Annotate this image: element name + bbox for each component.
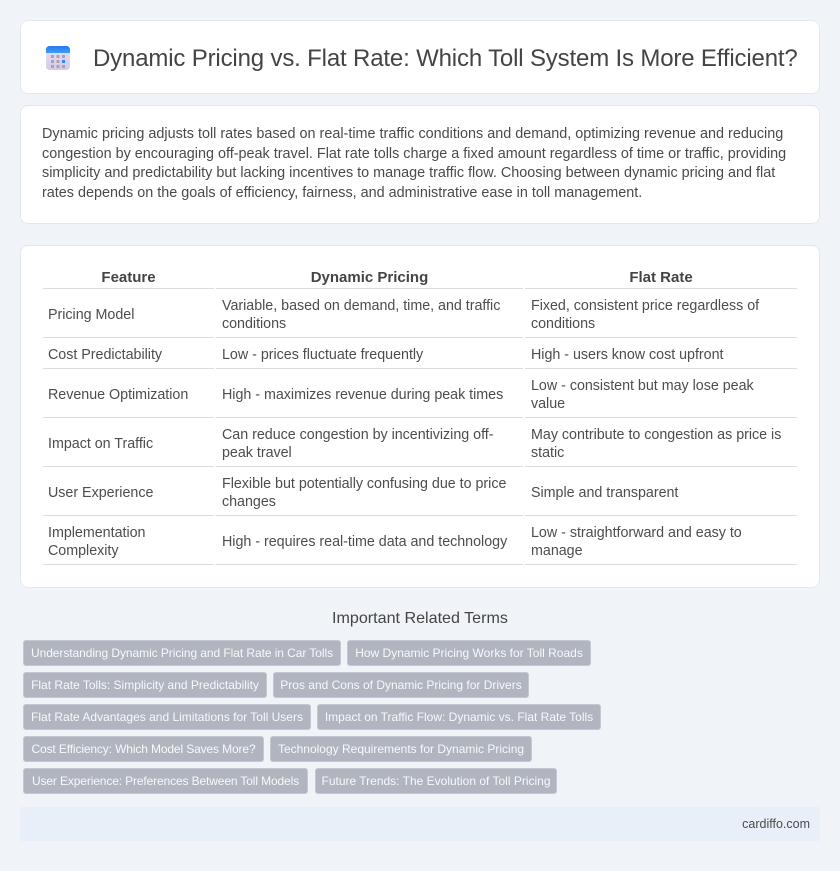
text: value: [531, 396, 565, 412]
header card: [20, 20, 820, 94]
tag list: Cost Efficiency: Which Model Saves More?: [31, 742, 256, 756]
text: conditions: [531, 316, 595, 332]
panel: comparison table: [20, 245, 820, 588]
row: revenue optimization: Revenue Optimization: [48, 387, 188, 403]
text: Low - consistent but may lose peak: [531, 378, 754, 394]
text: High - maximizes revenue during peak times: [222, 387, 503, 403]
panel: intro: [20, 105, 820, 224]
text: Fixed, consistent price regardless of: [531, 298, 759, 314]
row: implementation complexity: [48, 525, 145, 559]
intro text: congestion by encouraging off-peak travel. Flat rate tolls charge a fixed amount regardless of time or traffic, providing: [42, 146, 786, 162]
text: manage: [531, 543, 583, 559]
row: user experience: User Experience: [48, 485, 153, 501]
tag list: Pros and Cons of Dynamic Pricing for Drivers: [280, 678, 522, 692]
table header: Feature: [101, 269, 156, 286]
text: peak travel: [222, 445, 292, 461]
row: cost predictability: Cost Predictability: [48, 347, 162, 363]
heading: related terms: Important Related Terms: [332, 609, 508, 627]
row: implementation complexity: Implementation: [48, 525, 145, 541]
text: conditions: [222, 316, 286, 332]
text: static: [531, 445, 564, 461]
tag list: How Dynamic Pricing Works for Toll Roads: [355, 646, 583, 660]
tag list: User Experience: Preferences Between Toll Models: [32, 774, 299, 788]
text: May contribute to congestion as price is: [531, 427, 781, 443]
text: Dynamic Pricing: [311, 269, 428, 286]
footer: [20, 807, 820, 841]
tag list: [23, 640, 601, 794]
footer credit: cardiffo.com: [742, 817, 810, 831]
text: High - requires real-time data and technology: [222, 534, 507, 550]
row: implementation complexity: Complexity: [48, 543, 119, 559]
text: Flat Rate: [629, 269, 693, 286]
tag list: Impact on Traffic Flow: Dynamic vs. Flat Rate Tolls: [325, 710, 593, 724]
text: Simple and transparent: [531, 485, 678, 501]
intro text: Dynamic pricing adjusts toll rates based on real-time traffic conditions and demand, optimizing revenue and reducing: [42, 126, 783, 142]
row: pricing model: Pricing Model: [48, 307, 134, 323]
text: Low - prices fluctuate frequently: [222, 347, 423, 363]
intro text: rates depends on the goals of efficiency, fairness, and administrative ease in toll management.: [42, 184, 642, 200]
tag list: Understanding Dynamic Pricing and Flat Rate in Car Tolls: [31, 646, 333, 660]
text: Can reduce congestion by incentivizing off-: [222, 427, 493, 443]
tag list: Technology Requirements for Dynamic Pricing: [278, 742, 524, 756]
title: Dynamic Pricing vs. Flat Rate: Which Toll System Is More Efficient?: [93, 45, 798, 72]
icon: calendar: [46, 46, 70, 70]
tag list: Future Trends: The Evolution of Toll Pricing: [321, 774, 550, 788]
text: Low - straightforward and easy to: [531, 525, 742, 541]
tag list: Flat Rate Tolls: Simplicity and Predictability: [31, 678, 259, 692]
text: changes: [222, 494, 276, 510]
text: High - users know cost upfront: [531, 347, 724, 363]
text: Flexible but potentially confusing due to price: [222, 476, 506, 492]
tag list: Flat Rate Advantages and Limitations for Toll Users: [31, 710, 303, 724]
row: impact on traffic: Impact on Traffic: [48, 436, 153, 452]
intro text: simplicity and predictability but lacking incentives to manage traffic flow. Choosing between dynamic pricing and flat: [42, 165, 775, 181]
text: Variable, based on demand, time, and traffic: [222, 298, 500, 314]
intro text: [42, 126, 786, 200]
